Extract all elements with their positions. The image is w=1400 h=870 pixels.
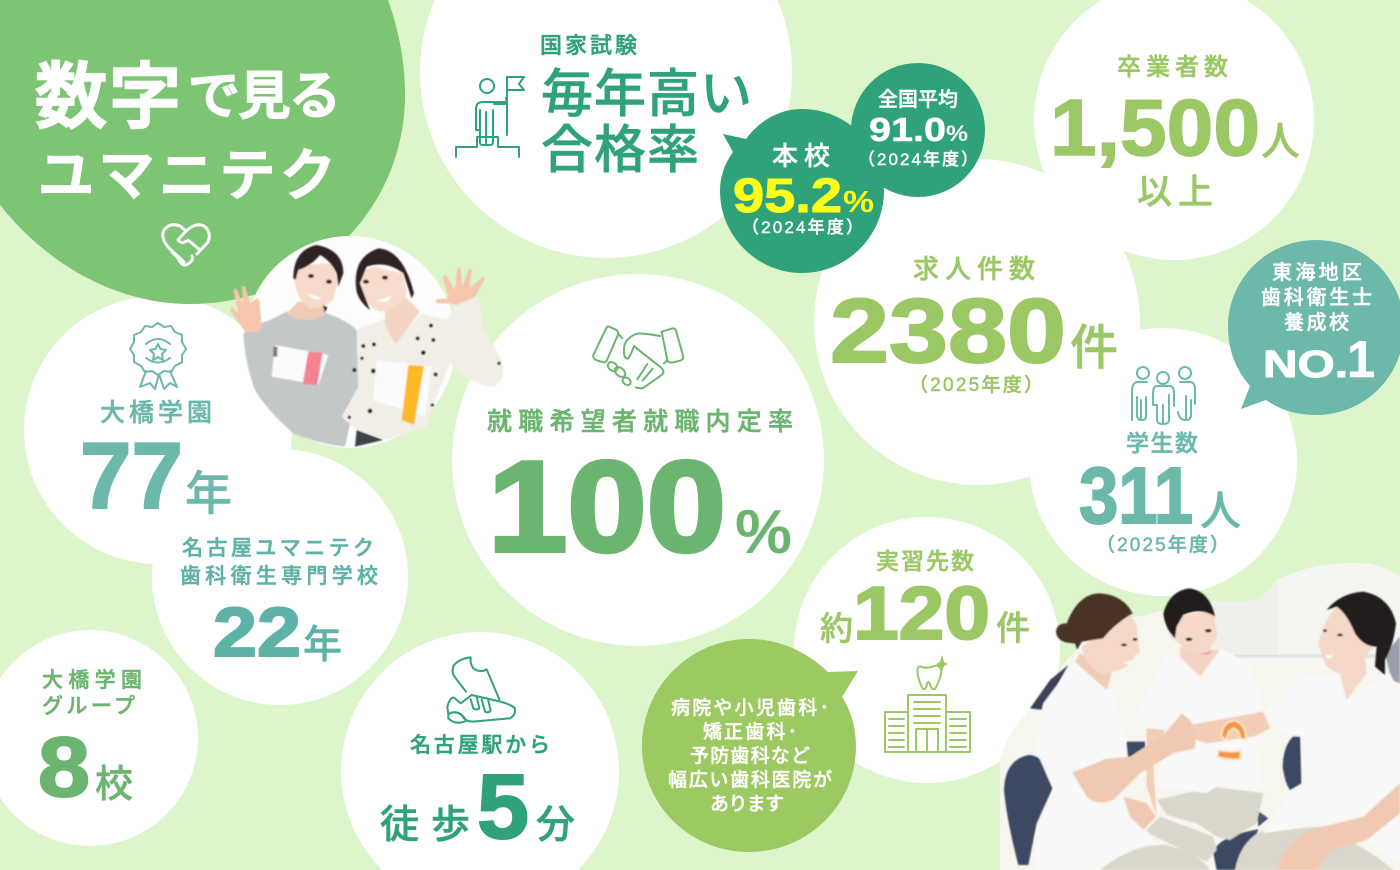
number: 311: 311	[1079, 451, 1193, 540]
label: national exam: 国家試験	[540, 33, 637, 58]
number: 5 minutes on foot: 徒歩	[380, 804, 470, 847]
number: 100 percent: 100	[488, 435, 726, 579]
number: about 120 sites: 件	[996, 610, 1030, 648]
icon: medal	[130, 323, 186, 389]
number: 95.2 percent: %	[843, 184, 874, 219]
heading: high pass rate every year	[541, 66, 752, 180]
panel: Ohashi Gakuen 77 years	[24, 296, 292, 564]
photo: two students waving with books	[230, 236, 503, 448]
number: 22 years: 22	[213, 593, 301, 671]
callout text: 予防歯科など	[690, 745, 810, 767]
title block	[0, 0, 405, 304]
number: 311: （2025年度）	[1096, 534, 1229, 556]
callout text: 東海地区	[1272, 261, 1362, 284]
callout text: 矯正歯科･	[703, 721, 797, 743]
callout: No.1 in Tokai	[1228, 240, 1400, 415]
number: 22 years	[213, 593, 342, 671]
label: school name: 歯科衛生専門学校	[180, 565, 378, 588]
right student	[1190, 592, 1400, 870]
number: about 120 sites: 120	[853, 571, 990, 655]
callout text	[1261, 261, 1372, 334]
book: orange	[373, 360, 432, 425]
number: 311: 人	[1200, 488, 1241, 534]
panel: nationwide exam pass rate	[420, 0, 792, 258]
label: job offers count: 求人件数	[913, 254, 1035, 284]
callout text: 幅広い歯科医院が	[668, 769, 832, 791]
number: 91.0 percent: 91.0	[869, 111, 946, 148]
number: 5 minutes on foot: 分	[536, 804, 575, 847]
heading: high pass rate every year: 合格率	[541, 122, 699, 180]
number: 77 years	[80, 423, 232, 528]
label: Ohashi Gakuen Group: 大橋学園	[42, 669, 142, 692]
label: students count: 学生数	[1126, 430, 1198, 456]
photo: three dental hygiene students in clinic	[1000, 563, 1400, 870]
dental chairs	[1004, 637, 1400, 870]
heading: numbers at a glance: ユマニテク	[38, 131, 336, 212]
icon: tooth and clinic building	[885, 655, 970, 752]
panel: students	[1029, 328, 1297, 596]
panel: graduates	[1034, 0, 1314, 260]
dental model	[1217, 721, 1246, 759]
label: internship sites count: 実習先数	[876, 548, 974, 574]
number: 8 schools	[38, 720, 133, 814]
number: 2380	[830, 281, 1118, 396]
number: 5 minutes on foot: 5	[477, 756, 529, 858]
number: 91.0 percent	[869, 111, 968, 148]
label: Ohashi Gakuen Group: グループ	[42, 695, 135, 718]
callout text: 養成校	[1284, 311, 1349, 334]
left student	[1035, 593, 1217, 870]
number: 91.0 percent: %	[946, 121, 968, 146]
number: 95.2 percent	[733, 170, 874, 223]
panel: job offers	[814, 159, 1140, 485]
book: pink	[272, 345, 328, 385]
callout text: 病院や小児歯科･	[671, 697, 829, 719]
number: 77 years: 年	[185, 467, 232, 520]
number: No.1: 1	[1347, 331, 1375, 389]
icon: three people	[1132, 367, 1195, 424]
panel: Nagoya Humanitech 22 years	[152, 449, 408, 705]
callout: clinic types	[642, 639, 858, 852]
number: 311	[1079, 451, 1241, 556]
label: national average: 全国平均	[878, 88, 958, 111]
right student	[342, 248, 503, 447]
icon: heart handshake	[163, 225, 209, 265]
number: 2380: 件	[1070, 322, 1118, 375]
heading: numbers at a glance	[35, 38, 341, 212]
callout text	[668, 697, 832, 815]
number: 100 percent: %	[735, 498, 792, 567]
number: 77 years: 77	[80, 423, 183, 528]
label: from Nagoya Station: 名古屋駅から	[410, 734, 550, 757]
label: Ohashi Gakuen: 大橋学園	[100, 399, 212, 427]
number: about 120 sites	[820, 571, 1030, 655]
icon: person with flag on podium	[456, 77, 524, 157]
label: job placement rate: 就職希望者就職内定率	[487, 408, 793, 436]
number: 1,500 people or more: 以上	[1137, 173, 1213, 212]
number: 2380: 2380	[830, 281, 1066, 382]
number: 1,500 people or more: 1,500	[1050, 83, 1260, 172]
icon: shoes	[447, 657, 515, 723]
label: Ohashi Gakuen Group	[42, 669, 142, 718]
number: No.1	[1263, 331, 1375, 389]
heading: high pass rate every year: 毎年高い	[541, 66, 752, 124]
heading: numbers at a glance: 数字	[35, 38, 181, 143]
panel: internship sites	[794, 517, 1060, 783]
label: fiscal year 2024: （2024年度）	[742, 218, 863, 237]
panel: 8 group schools	[0, 630, 198, 846]
label: our school: 本校	[772, 141, 830, 171]
panel: job placement rate	[452, 274, 824, 646]
callout text: あります	[710, 794, 784, 815]
heading: numbers at a glance: で見る	[188, 54, 341, 129]
callout: our school rate	[720, 109, 884, 273]
panel: 5 minutes walk	[341, 632, 619, 870]
number: about 120 sites: 約	[820, 610, 853, 647]
number: 95.2 percent: 95.2	[733, 170, 842, 223]
number: 2380: （2025年度）	[909, 374, 1043, 396]
number: 22 years: 年	[303, 624, 342, 667]
callout: national average	[851, 63, 985, 197]
label: fiscal year 2024: （2024年度）	[858, 150, 978, 169]
label: graduates count: 卒業者数	[1117, 54, 1228, 81]
number: 8 schools: 8	[38, 720, 90, 814]
number: 5 minutes on foot	[380, 756, 575, 858]
middle student	[1133, 588, 1263, 840]
left student	[230, 245, 358, 447]
label: school name: 名古屋ユマニテク	[182, 537, 374, 560]
callout text: 歯科衛生士	[1261, 286, 1372, 309]
number: No.1: NO.	[1263, 344, 1348, 386]
number: 1,500 people or more: 人	[1261, 121, 1300, 164]
number: 8 schools: 校	[95, 764, 133, 806]
number: 1,500 people or more	[1050, 83, 1300, 212]
icon: handshake	[593, 326, 683, 388]
label: school name	[180, 537, 378, 588]
